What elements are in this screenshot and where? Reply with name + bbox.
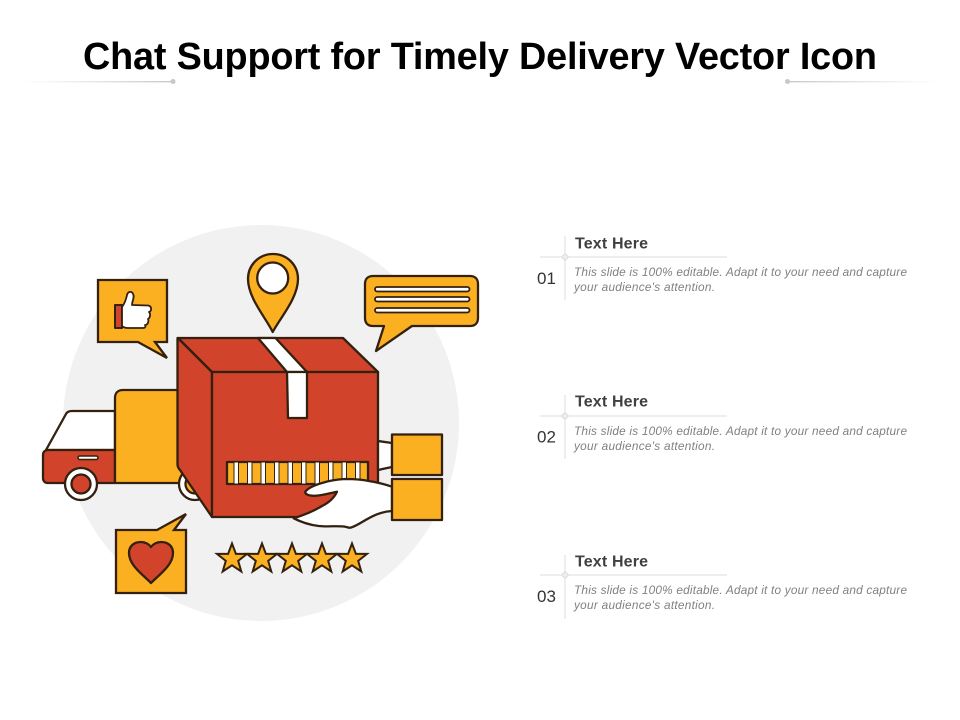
icon: heart speech bubble — [116, 514, 186, 593]
illustration: delivery support — [43, 225, 478, 621]
text block 03 — [537, 554, 907, 619]
text block 02: Text Here — [575, 394, 648, 410]
text block 02: 02 — [537, 428, 556, 446]
barcode — [227, 462, 368, 484]
icon: location pin — [248, 254, 298, 332]
text block 03: This slide is 100% editable. Adapt it to your need and capture — [574, 583, 907, 597]
title: Chat Support for Timely Delivery Vector Icon — [83, 36, 877, 78]
text block 01 — [537, 236, 907, 300]
text block 02: your audience's attention. — [573, 439, 715, 453]
text block 03: 03 — [537, 587, 556, 606]
text block 03: Text Here — [575, 554, 648, 570]
text block 01: your audience's attention. — [573, 280, 715, 294]
icon: cardboard box — [178, 338, 378, 517]
text block 03: your audience's attention. — [573, 598, 715, 612]
icon: thumbs up speech bubble — [98, 280, 167, 358]
text block 01: Text Here — [575, 236, 648, 252]
rating stars — [217, 544, 367, 572]
text block 02 — [537, 394, 907, 459]
background circle — [63, 225, 459, 621]
text block 01: This slide is 100% editable. Adapt it to your need and capture — [574, 265, 907, 279]
icon: delivery truck — [43, 390, 211, 500]
icon: chat bubble — [365, 276, 478, 351]
text block 01: 01 — [537, 269, 556, 288]
icon: hand holding the box — [294, 441, 392, 528]
text block 02: This slide is 100% editable. Adapt it to your need and capture — [574, 424, 907, 438]
icon: package squares — [392, 434, 442, 520]
